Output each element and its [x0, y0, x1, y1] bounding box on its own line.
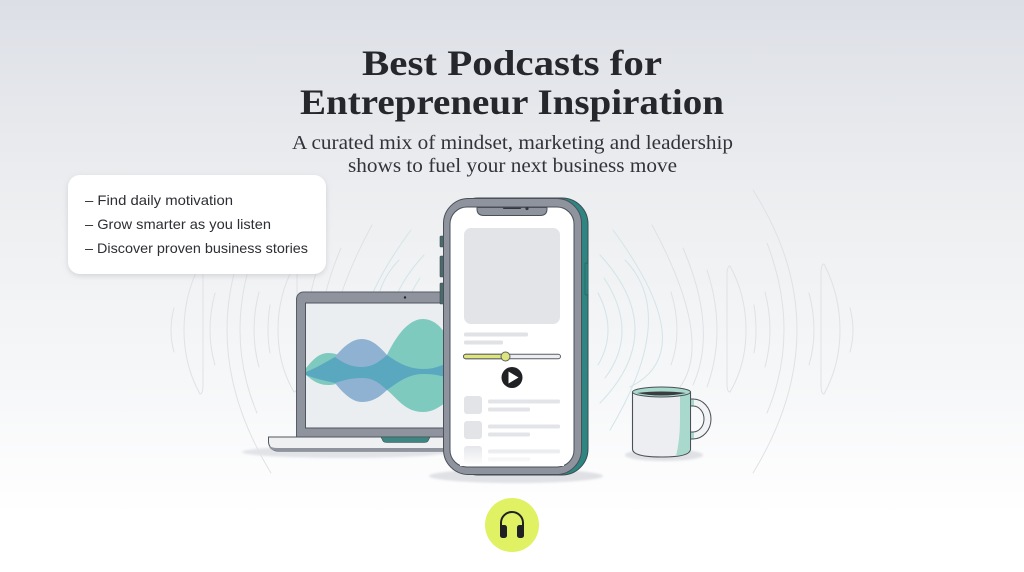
callout card: [68, 175, 326, 274]
progress slider: [464, 352, 560, 361]
title: Best Podcasts for: [362, 43, 662, 83]
headphones badge: [485, 498, 539, 552]
subtitle: shows to fuel your next business move: [348, 156, 677, 177]
callout card: – Discover proven business stories: [85, 240, 308, 256]
episode list: [460, 396, 564, 466]
laptop: [242, 292, 450, 458]
phone side buttons: [440, 236, 444, 304]
callout card: – Grow smarter as you listen: [85, 216, 271, 232]
track title lines: [464, 332, 528, 344]
play button: [502, 367, 522, 388]
laptop waveform: [306, 319, 445, 412]
sound waves: right: [598, 190, 853, 473]
title: Entrepreneur Inspiration: [300, 82, 724, 122]
smartphone: [429, 198, 603, 483]
title: [300, 43, 724, 122]
coffee mug: [625, 387, 711, 461]
subtitle: A curated mix of mindset, marketing and leadership: [292, 133, 733, 154]
sound waves: left: [171, 190, 426, 473]
album art placeholder: [464, 228, 560, 324]
callout card: – Find daily motivation: [85, 192, 233, 208]
subtitle: [292, 133, 733, 177]
